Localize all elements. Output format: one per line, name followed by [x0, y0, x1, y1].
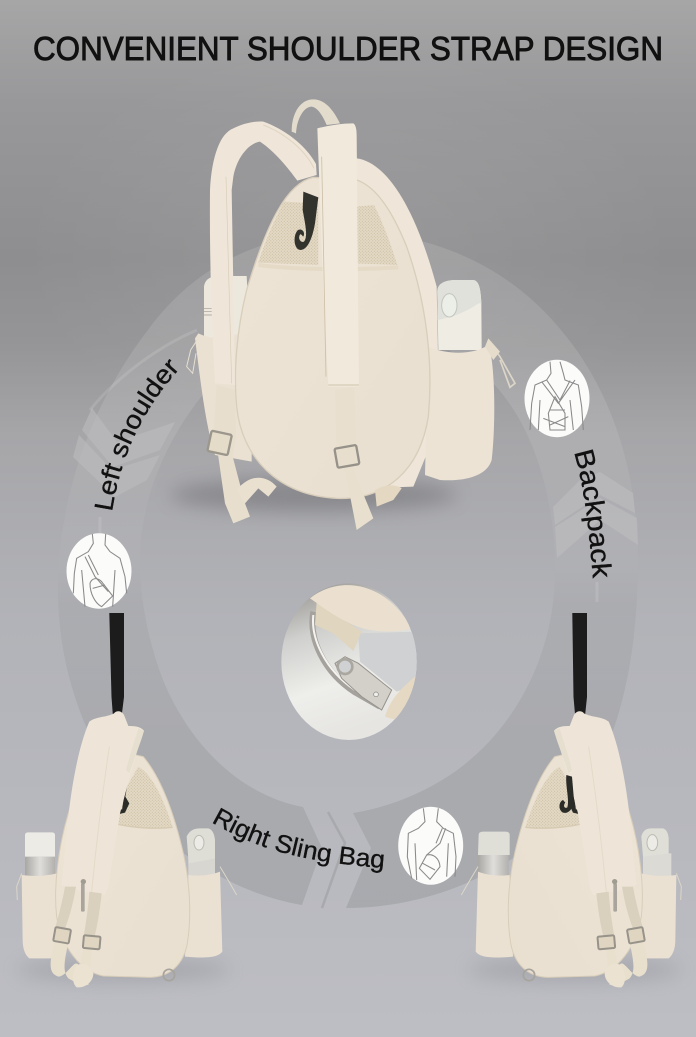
silver bottle — [25, 832, 55, 877]
button bottle — [641, 828, 671, 877]
drawcord loop left — [187, 338, 198, 373]
floor shadow — [170, 478, 457, 512]
right webbing — [335, 387, 373, 530]
left buckle — [207, 431, 232, 455]
grey background patch — [358, 632, 417, 692]
silver hook arc — [312, 612, 380, 707]
left bottle — [204, 276, 250, 343]
right buckle — [334, 445, 359, 468]
ribbon — [315, 602, 362, 651]
circular arrow ring — [58, 232, 638, 908]
silver bottle — [478, 832, 510, 877]
title: CONVENIENT SHOULDER STRAP DESIGN — [33, 30, 663, 67]
beige top lobe — [310, 585, 412, 632]
far strap — [292, 99, 340, 133]
left webbing — [213, 385, 250, 523]
drawcord loop right — [488, 340, 515, 387]
bottom chevron stripe — [322, 812, 345, 908]
left chevrons — [73, 408, 175, 497]
mesh pocket — [258, 202, 398, 269]
icon: right sling wearer — [398, 807, 463, 885]
bag — [17, 711, 237, 987]
left pocket — [195, 330, 252, 462]
front panel — [235, 177, 430, 498]
ring centre line — [90, 330, 597, 602]
right sling bag label: Right Sling Bag — [212, 808, 384, 873]
detail: metal clasp — [281, 583, 417, 740]
right sling bag product — [461, 711, 681, 987]
beige tab — [385, 675, 417, 720]
right bottle — [437, 280, 482, 350]
hook — [295, 192, 318, 250]
right pocket — [425, 345, 494, 480]
left strap upper — [210, 121, 317, 385]
left racket handle — [109, 613, 124, 717]
rear shell — [280, 158, 439, 490]
icon: left shoulder wearer — [66, 533, 132, 609]
right chevrons — [553, 472, 638, 558]
left shoulder label: Left shoulder — [94, 359, 178, 510]
clasp body — [335, 657, 392, 710]
bag mirrored — [461, 711, 681, 987]
icon: backpack wearer — [524, 360, 590, 437]
hook — [559, 775, 574, 813]
backpack label: Backpack — [574, 449, 612, 579]
button bottle — [187, 828, 215, 877]
backpack main product — [170, 99, 515, 530]
right racket handle — [572, 613, 587, 716]
right strap — [317, 123, 359, 387]
drawcord tie — [485, 338, 500, 360]
left sling bag — [17, 711, 237, 987]
